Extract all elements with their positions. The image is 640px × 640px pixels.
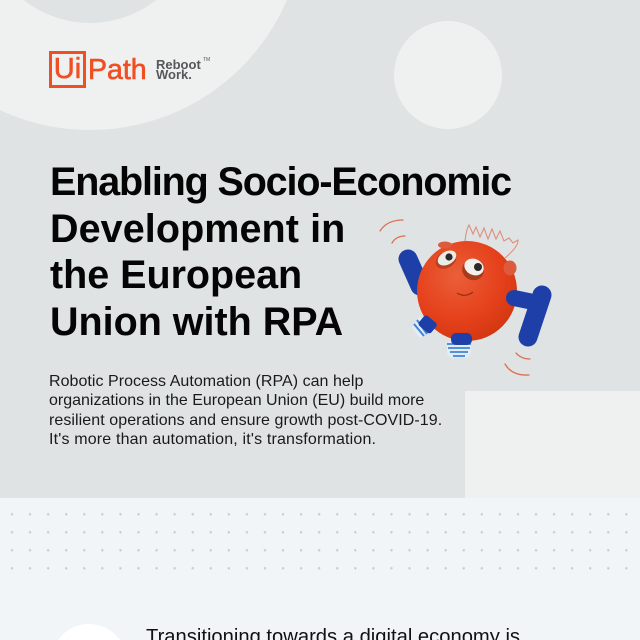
title: Development in (50, 207, 345, 251)
icon: red robot character (379, 219, 552, 376)
eyes (432, 247, 487, 284)
logo mark: Ui box (49, 51, 86, 88)
intro paragraph (49, 373, 442, 448)
icon: white circle (58, 624, 120, 640)
title: Enabling Socio-Economic (50, 160, 511, 204)
smile (457, 292, 473, 295)
hair scribble (465, 225, 518, 258)
bottom foot socks (447, 340, 471, 358)
ear bumps (504, 260, 516, 276)
right arm (514, 295, 542, 337)
left arm (408, 259, 420, 286)
intro paragraph: resilient operations and ensure growth post-COVID-19. (49, 412, 442, 429)
bottom shoe (451, 333, 472, 345)
intro paragraph: organizations in the European Union (EU) build more (49, 392, 424, 409)
left foot socks (412, 316, 432, 338)
title (50, 160, 511, 344)
body (417, 241, 517, 341)
logo mark: Ui box: Ui (54, 53, 81, 85)
logo: UiPath Reboot Work (49, 51, 210, 88)
left shoe (417, 314, 438, 335)
motion arcs (380, 220, 530, 375)
logo tagline: Reboot Work: Work. (156, 67, 192, 82)
intro paragraph: Robotic Process Automation (RPA) can help (49, 373, 363, 390)
bottom section: white circle icon and text (58, 624, 520, 640)
title: Union with RPA (50, 300, 343, 344)
logo tagline: Reboot Work: TM (203, 57, 210, 63)
logo tagline: Reboot Work: Reboot (156, 57, 201, 72)
logo wordmark: Path: Path (88, 54, 147, 86)
intro paragraph: It's more than automation, it's transformation. (49, 431, 376, 448)
dot grid pattern (10, 513, 628, 570)
title: the European (50, 253, 302, 297)
logo tagline: Reboot Work (156, 57, 210, 82)
